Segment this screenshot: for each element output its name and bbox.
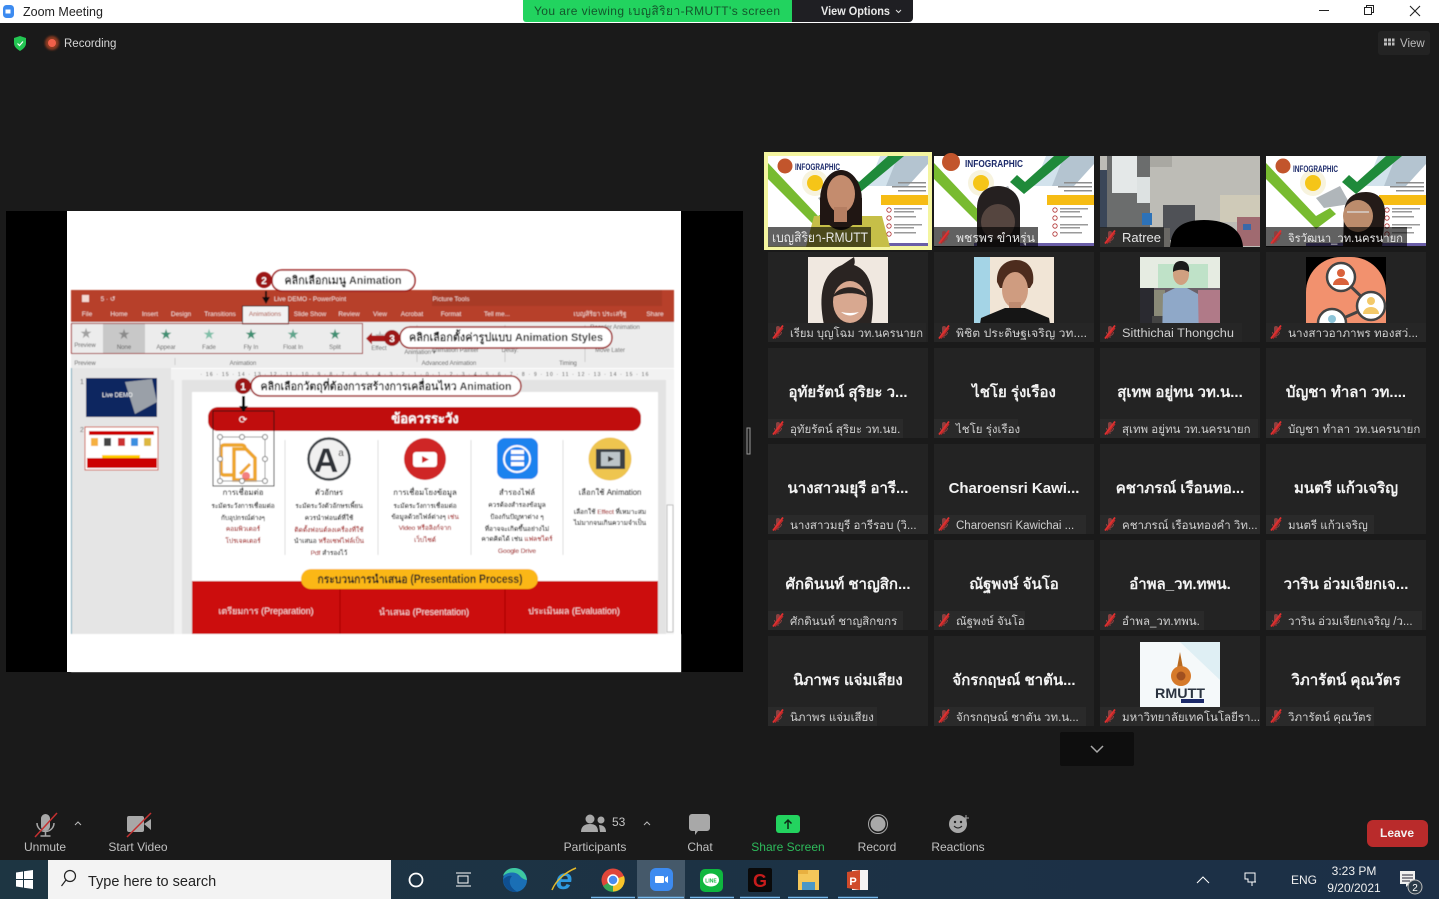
animations tab <box>242 306 288 324</box>
tiles row 4: คชาภรณ์ เรือนทอ... <box>1116 479 1244 497</box>
splitter handle <box>747 428 750 454</box>
column: fonts: ระมัดระวังตัวอักษรเพี้ยน <box>295 501 363 510</box>
callout 1: 1 <box>240 382 246 393</box>
tiles row 5 <box>768 574 1422 630</box>
participant tile backgrounds <box>768 252 1426 726</box>
view button: View <box>1400 38 1425 50</box>
tiles row 3: บัญชา ทำลา วท.นครนายก <box>1288 423 1420 436</box>
powerpoint ribbon: Preview <box>74 361 96 367</box>
tiles row 4: มนตรี แก้วเจริญ <box>1294 479 1398 497</box>
column: connection: คอมพิวเตอร์ <box>226 525 261 533</box>
tiles row 6: วิภารัตน์ คุณวัตร <box>1291 671 1402 690</box>
tiles row 5: วาริน อ่วมเจียกเจริญ /ว... <box>1288 615 1413 628</box>
powerpoint ribbon: ★ <box>374 328 386 343</box>
powerpoint ribbon: Advanced Animation <box>422 361 476 367</box>
panel: video tile 2 <box>934 153 1094 247</box>
powerpoint ribbon: Animation <box>230 361 256 367</box>
animations tab: Animations <box>249 311 282 318</box>
process section: ประเมินผล (Evaluation) <box>528 606 620 616</box>
column: animation: เลือกใช้ Animation <box>579 488 641 497</box>
powerpoint ribbon: Picture Tools <box>432 296 470 303</box>
icon: cortana <box>410 874 422 886</box>
column: data links: ระมัดระวังการเชื่อมต่อ <box>393 501 457 510</box>
column: data links: การเชื่อมโยงข้อมูล <box>393 487 457 498</box>
powerpoint ribbon: Timing <box>559 361 577 367</box>
tiles row 5: อำพล_วท.ทพน. <box>1122 615 1200 628</box>
icon: line <box>700 869 723 892</box>
powerpoint ribbon: 5 · ↺ <box>101 296 115 303</box>
tile labels row 2: พิชิต ประดิษฐเจริญ วท.... <box>956 327 1087 340</box>
animation styles gallery: ★ <box>287 326 299 342</box>
column: animation: ไม่มากจนเกินความจำเป็น <box>573 518 647 527</box>
banner: you are viewing screen: View Options <box>821 4 890 18</box>
banner: you are viewing screen: You are viewing เบญสิริยา-RMUTT's screen <box>534 4 780 18</box>
powerpoint ribbon: Transitions <box>204 311 237 318</box>
toolbar: start video <box>108 813 168 854</box>
panel: video tile 4: INFOGRAPHIC <box>1293 164 1338 174</box>
animation styles gallery: Fade <box>202 345 216 351</box>
process section <box>192 569 658 634</box>
icon: windows start <box>16 870 33 889</box>
process section: กระบวนการนำเสนอ (Presentation Process) <box>318 572 523 586</box>
system tray: ENG <box>1291 873 1317 887</box>
status: security and recording: Recording <box>64 38 116 50</box>
tiles row 5: ศักดินนท์ ชาญสิก... <box>785 575 911 593</box>
toolbar: unmute: Unmute <box>24 840 66 854</box>
powerpoint ribbon: เบญสิริยา ประเสริฐ <box>574 310 627 318</box>
column: connection: การเชื่อมต่อ <box>223 487 263 497</box>
powerpoint ribbon: File <box>82 311 93 318</box>
panel: video tile active speaker: INFOGRAPHIC <box>795 162 840 172</box>
tiles row 5: ศักดินนท์ ชาญสิกขกร <box>790 614 897 628</box>
animation styles gallery: ★ <box>160 326 172 342</box>
powerpoint ribbon: Animation ▾ <box>404 350 436 356</box>
toolbar: share screen: Share Screen <box>751 840 825 854</box>
icon: edge <box>503 868 527 892</box>
process section: เตรียมการ (Preparation) <box>218 606 314 616</box>
avatar: man <box>974 257 1054 342</box>
toolbar: unmute <box>24 813 81 854</box>
callout 2: 2 <box>261 276 267 287</box>
system tray: 2 <box>1412 883 1418 894</box>
icon: garena <box>748 868 772 892</box>
animation styles gallery: Fly In <box>244 345 258 351</box>
panel: shared slide: · 16 · 15 · 14 · 13 · 12 · 11 · 10 · 9 · 8 · 7 · 6 · 5 · 4 · 3 · 2 · 1 · 0 · 1 · 2 · 3 · 4 · 5 · 6 · 7 · 8 · 9 · 10 · 11 · 12 · 13 · 14 · 15 · 16 <box>200 372 650 378</box>
ruler <box>171 369 674 380</box>
slide thumbnails pane: 2 <box>80 427 84 434</box>
tiles row 3 <box>768 382 1420 438</box>
tiles row 6: วิภารัตน์ คุณวัตร <box>1287 710 1372 724</box>
column: backup: Google Drive <box>498 548 536 555</box>
powerpoint ribbon: Tell me... <box>484 311 510 318</box>
tiles row 4: นางสาวมยุรี อารี... <box>788 480 908 498</box>
icon: backup <box>497 438 538 479</box>
column: animation <box>573 488 647 527</box>
column: fonts: ควรนำฟอนต์ที่ใช้ <box>305 513 354 522</box>
icon: chrome <box>602 868 625 892</box>
tiles row 3: สุเทพ อยู่ทน วท.นครนายก <box>1122 424 1251 436</box>
column: animation: เลือกใช้ Effect ที่เหมาะสม <box>574 507 646 516</box>
icon: powerpoint <box>847 870 868 890</box>
column: data links: เว็บไซต์ <box>414 535 436 544</box>
powerpoint ribbon <box>71 290 674 368</box>
animation styles gallery: None <box>117 345 132 351</box>
tiles row 4 <box>768 479 1398 534</box>
slide canvas <box>192 392 658 634</box>
animation styles gallery: ★ <box>118 326 130 342</box>
column: fonts: Pdf สำรองไว้ <box>311 549 348 557</box>
column: fonts <box>294 488 365 557</box>
column: data links <box>391 487 459 544</box>
thumbnail 1: Live DEMO <box>102 393 133 399</box>
column: backup: ป้องกันปัญหาต่าง ๆ <box>490 513 544 521</box>
leave button: Leave <box>1380 826 1414 840</box>
powerpoint ribbon: View <box>373 311 387 318</box>
toolbar: record: Record <box>858 840 896 854</box>
animation styles gallery: Split <box>329 345 341 351</box>
toolbar: chat: Chat <box>687 840 713 854</box>
icon: garena: G <box>753 871 767 891</box>
callout 1 <box>235 376 521 412</box>
powerpoint ribbon: Insert <box>142 311 158 318</box>
tiles row 3: ไชโย รุ่งเรือง <box>970 382 1056 402</box>
animation styles gallery: ★ <box>203 326 215 342</box>
title bar <box>0 0 1439 23</box>
callout 3: คลิกเลือกตั้งค่ารูปแบบ Animation Styles <box>409 329 603 345</box>
system tray: 9/20/2021 <box>1327 881 1381 895</box>
tile labels row 2 <box>768 323 1426 342</box>
tiles row 6 <box>768 671 1402 726</box>
tiles row 6: นิภาพร แจ่มเสียง <box>790 711 874 724</box>
icon: font <box>308 438 350 480</box>
toolbar: reactions <box>931 815 985 854</box>
tile labels row 2: นางสาวอาภาพร ทองสว่... <box>1288 328 1418 340</box>
icon: task view <box>456 873 471 886</box>
toolbar: participants: 53 <box>612 815 626 829</box>
slide heading banner: ข้อควรระวัง <box>391 411 459 426</box>
animation styles gallery: ★ <box>80 325 92 341</box>
panel: video tile 4 <box>1266 156 1426 247</box>
column: fonts: นำเสนอ หรือเซฟไฟล์เป็น <box>294 536 365 545</box>
tiles row 3: บัญชา ทำลา วท.... <box>1286 384 1406 401</box>
tiles row 5: ณัฐพงษ์ จันโอ <box>956 614 1025 628</box>
panel: shared slide <box>6 211 743 672</box>
leave button <box>1367 820 1428 847</box>
column: backup <box>481 488 553 555</box>
panel: video tile Ratree <box>1100 156 1260 247</box>
panel: video tile 2: พชรพร ขำหรุ่น <box>956 231 1035 246</box>
avatar: woman <box>808 257 888 342</box>
thumbnail 1 <box>86 378 157 417</box>
icon: internet explorer: e <box>556 863 572 896</box>
column: fonts: ตัวอักษร <box>315 488 343 497</box>
tiles row 3: ไชโย รุ่งเรือง <box>955 422 1020 436</box>
callout 3: 3 <box>389 334 395 345</box>
tiles row 5: อำพล_วท.ทพน. <box>1129 576 1231 593</box>
scroll down button <box>1060 732 1134 766</box>
windows taskbar <box>0 860 1439 899</box>
toolbar: chat <box>687 814 713 854</box>
column: fonts: ติดตั้งฟอนต์ลงเครื่องที่ใช้ <box>294 525 364 534</box>
system tray <box>1197 864 1422 895</box>
callout 1: คลิกเลือกวัตถุที่ต้องการสร้างการเคลื่อนไหว Animation <box>260 378 512 394</box>
toolbar: share screen <box>751 815 825 854</box>
column: connection: ระมัดระวังการเชื่อมต่อ <box>211 501 275 510</box>
icon: zoom active <box>637 860 685 899</box>
animation styles gallery: ★ <box>245 326 257 342</box>
powerpoint ribbon: Format <box>441 311 461 318</box>
avatar: RMUTT logo <box>1140 642 1220 726</box>
tiles row 6: จักรกฤษณ์ ชาตัน วท.น... <box>956 710 1079 724</box>
tiles row 4: คชาภรณ์ เรือนทองคำ วิท... <box>1122 518 1258 532</box>
tiles row 6: จักรกฤษณ์ ชาตัน... <box>952 671 1076 689</box>
toolbar: record <box>858 814 896 854</box>
powerpoint ribbon: Acrobat <box>401 311 423 318</box>
powerpoint ribbon: Effect <box>371 346 387 352</box>
column: backup: ควรต้องสำรองข้อมูล <box>488 501 546 509</box>
system tray: 3:23 PM <box>1332 864 1376 878</box>
icon: animation film <box>588 438 632 480</box>
search box <box>48 860 391 899</box>
animation styles gallery: Preview <box>74 343 96 349</box>
avatar: group photo <box>1140 257 1220 342</box>
panel: video tile 4: จิรวัฒนา_วท.นครนายก <box>1288 232 1403 245</box>
slide thumbnails pane <box>71 368 171 634</box>
tiles row 6: นิภาพร แจ่มเสียง <box>793 671 903 689</box>
tiles row 3: อุทัยรัตน์ สุริยะ วท.นย. <box>790 422 900 436</box>
column: connection: กับอุปกรณ์ต่างๆ <box>221 514 265 522</box>
animation styles gallery: ★ <box>329 326 341 342</box>
icon: folder <box>798 870 819 890</box>
panel: video tile active speaker <box>764 152 932 250</box>
animation styles gallery <box>72 324 362 354</box>
callout 2 <box>256 270 415 304</box>
tiles row 4: Charoensri Kawichai ... <box>956 520 1074 532</box>
search box: Type here to search <box>88 874 216 890</box>
powerpoint ribbon: Live DEMO - PowerPoint <box>274 296 346 303</box>
callout 3 <box>366 327 612 348</box>
powerpoint ribbon: Home <box>110 311 128 318</box>
tiles row 6: มหาวิทยาลัยเทคโนโลยีรา... <box>1122 710 1260 724</box>
powerpoint ribbon: Animation Painter <box>431 348 479 354</box>
icon: video <box>404 438 446 480</box>
toolbar: reactions: Reactions <box>931 840 985 854</box>
thumbnail 2 <box>85 427 158 470</box>
tiles row 4: Charoensri Kawi... <box>949 480 1079 497</box>
status: security and recording <box>14 36 116 51</box>
tiles row 4: มนตรี แก้วเจริญ <box>1288 519 1368 532</box>
column: backup: ที่อาจจะเกิดขึ้นอย่างไม่ <box>485 524 549 533</box>
toolbar: participants <box>564 814 650 854</box>
icon: font: a <box>338 448 344 459</box>
panel: video tile Ratree: Ratree <box>1122 230 1161 245</box>
view button <box>1378 31 1430 55</box>
avatar: RMUTT logo: RMUTT <box>1155 685 1205 701</box>
icon: powerpoint: P <box>849 876 857 888</box>
title bar: Zoom Meeting <box>23 5 103 19</box>
powerpoint ribbon: Move Later <box>595 348 625 354</box>
powerpoint ribbon: Reorder Animation <box>590 325 640 331</box>
animation styles gallery: Float In <box>283 345 303 351</box>
column: backup: สำรองไฟล์ <box>499 488 535 497</box>
column: connection: โปรเจคเตอร์ <box>225 537 261 545</box>
tile labels row 2: Sitthichai Thongchu <box>1122 328 1234 340</box>
toolbar: participants: Participants <box>564 840 626 854</box>
avatar: network icon <box>1306 257 1386 342</box>
column: data links: ข้อมูลด้วยไฟล์ต่างๆ เช่น <box>391 513 459 521</box>
column: backup: คาดคิดได้ เช่น แฟลชไดร์ <box>481 535 553 543</box>
toolbar: start video: Start Video <box>108 840 168 854</box>
column: data links: Video หรือลิงก์จาก <box>399 524 451 532</box>
powerpoint ribbon: Review <box>338 311 360 318</box>
animation styles gallery: Appear <box>156 345 176 351</box>
callout 2: คลิกเลือกเมนู Animation <box>284 274 402 288</box>
process section: นำเสนอ (Presentation) <box>379 607 469 617</box>
powerpoint ribbon: Share <box>646 311 664 318</box>
icon: line: LINE <box>705 878 717 884</box>
selection box: ⟳ <box>239 415 248 426</box>
powerpoint ribbon: Design <box>171 311 192 318</box>
slide heading banner <box>208 407 641 431</box>
tiles row 5: ณัฐพงษ์ จันโอ <box>969 574 1059 594</box>
selection box <box>213 411 274 486</box>
column: connection <box>211 487 275 545</box>
powerpoint ribbon: Slide Show <box>294 311 327 318</box>
tiles row 5: วาริน อ่วมเจียกเจ... <box>1284 575 1408 593</box>
panel: video tile active speaker: เบญสิริยา-RMUTT <box>772 230 868 245</box>
icon: internet explorer <box>552 863 576 896</box>
tiles row 3: อุทัยรัตน์ สุริยะ ว... <box>788 383 908 402</box>
slide thumbnails pane: 1 <box>80 379 84 386</box>
powerpoint ribbon: Delay: <box>501 348 519 354</box>
tile labels row 2: เรียม บุญโฉม วท.นครนายก <box>790 326 923 340</box>
tiles row 4: นางสาวมยุรี อารีรอบ (วิ... <box>790 519 917 532</box>
icon: font: A <box>314 442 338 480</box>
panel: video tile 2: INFOGRAPHIC <box>965 158 1023 170</box>
tiles row 3: สุเทพ อยู่ทน วท.น... <box>1117 384 1243 402</box>
icon: linked files <box>221 445 255 480</box>
banner: you are viewing screen <box>523 0 913 22</box>
